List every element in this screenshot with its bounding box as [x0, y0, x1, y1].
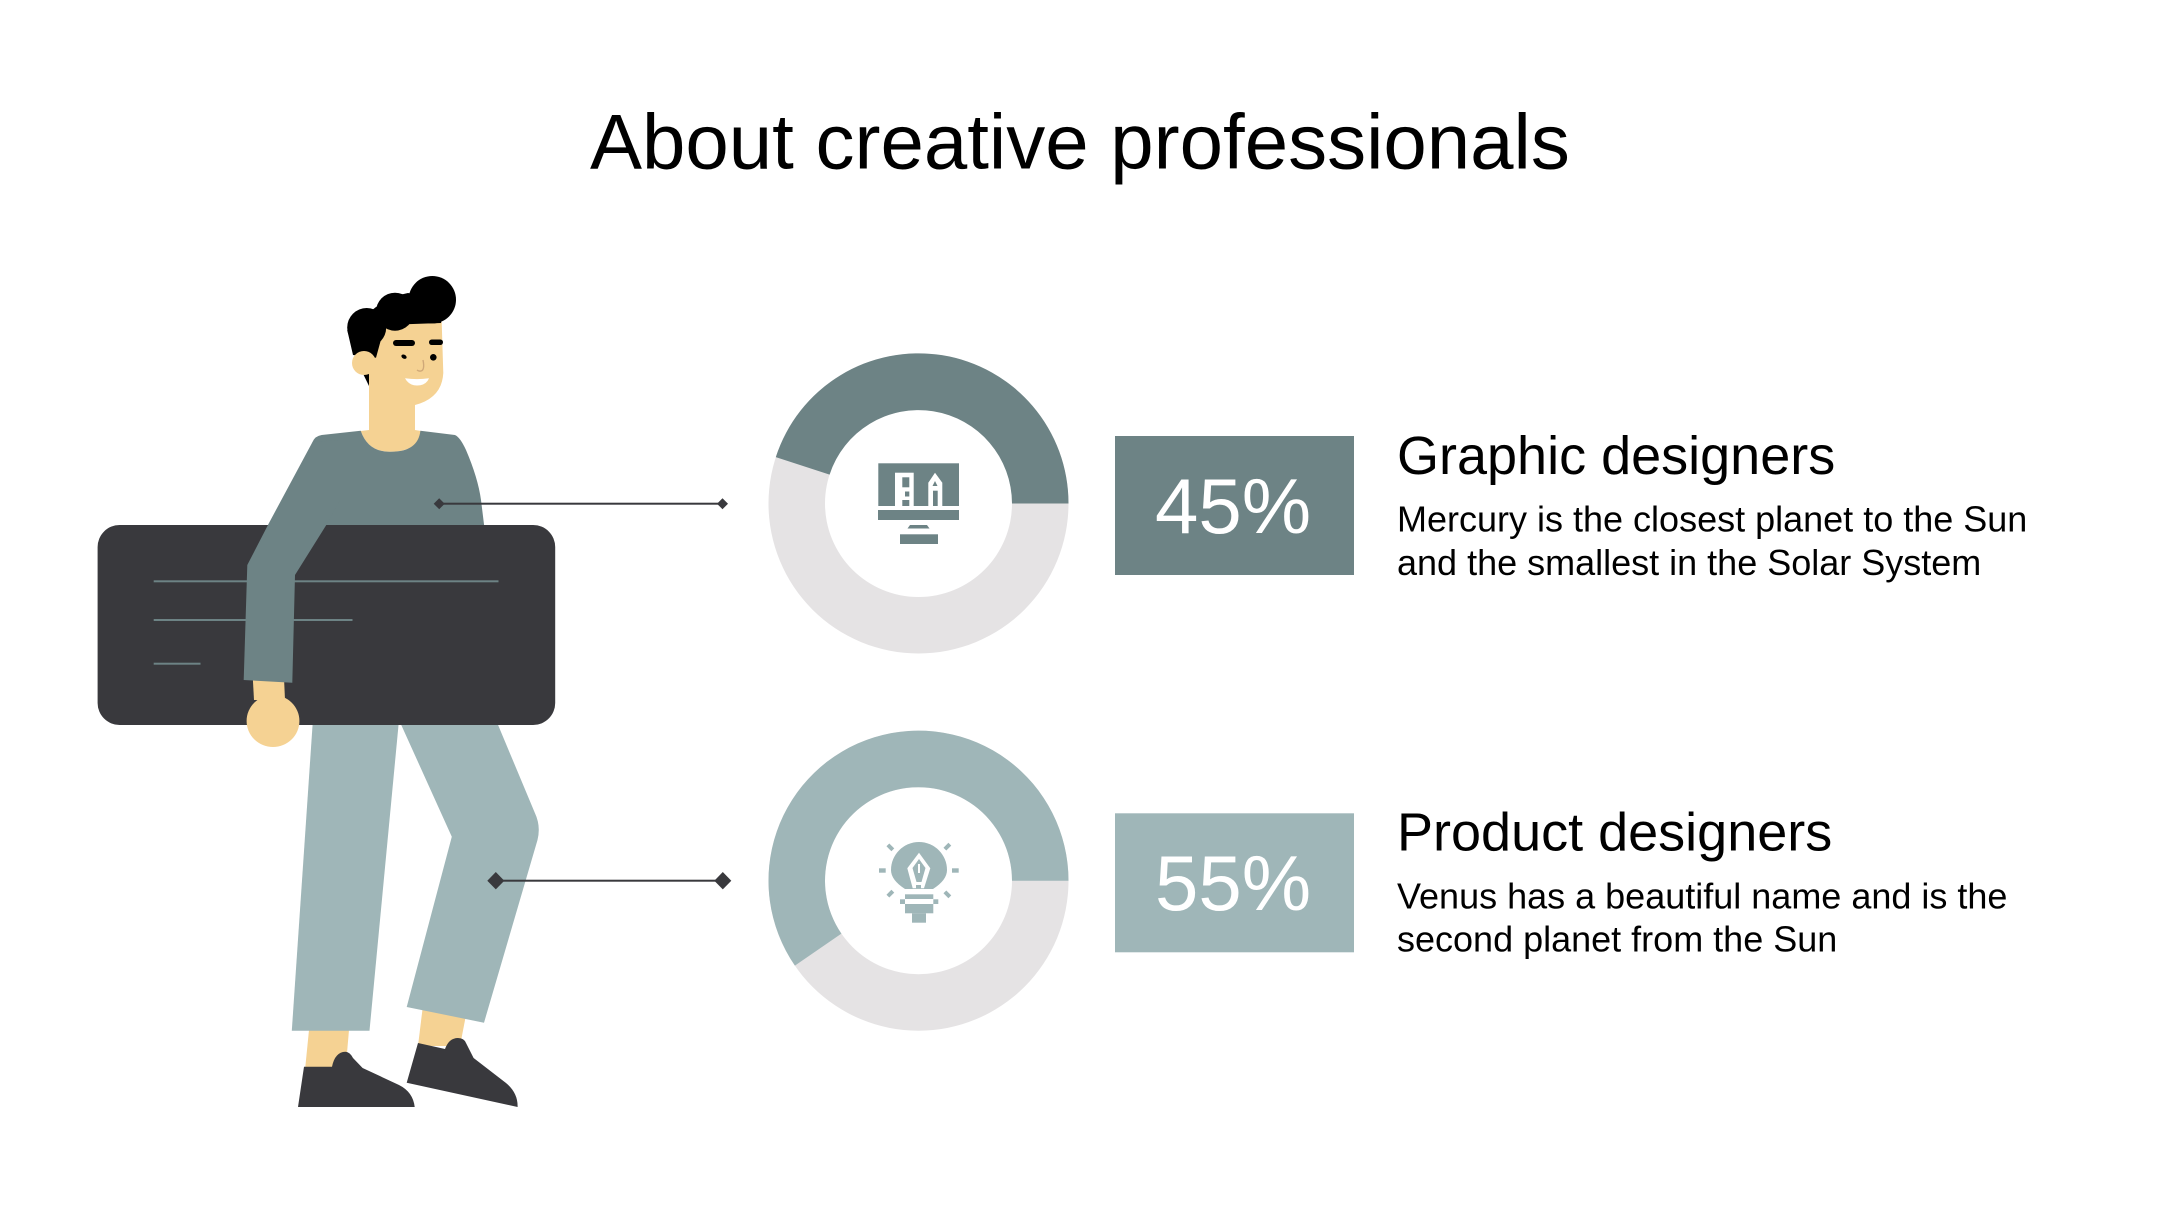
donut value arc: [768, 731, 1069, 966]
heading: graphic designers: Graphic designers: [1397, 426, 1835, 486]
donut chart: product designers 55%: [768, 731, 1069, 1031]
head: [347, 276, 456, 405]
ear: [352, 351, 376, 375]
donut base: [768, 354, 1068, 654]
percentage box: 45%: [1115, 436, 1354, 575]
arm sleeve: [244, 440, 340, 683]
title: About creative professionals: [590, 97, 1570, 185]
hair: [347, 276, 456, 358]
percentage box: 55%: 55%: [1155, 839, 1311, 927]
right eyebrow: [429, 340, 443, 345]
nose: [417, 360, 424, 371]
right eye: [430, 354, 437, 361]
percentage box: 55%: [1115, 813, 1354, 952]
text block: product designers: [1397, 803, 2007, 960]
right ankle: [418, 1005, 466, 1046]
body: venus: Venus has a beautiful name and is the: [1397, 875, 2007, 916]
heading: product designers: Product designers: [1397, 803, 1832, 863]
wrist: [253, 678, 285, 700]
smile: [405, 378, 429, 386]
tablet body: [98, 525, 555, 725]
right shoe: [407, 1038, 518, 1107]
left eye: [401, 354, 407, 360]
hand: [247, 695, 299, 747]
torso: [300, 431, 485, 530]
donut chart: graphic designers 45%: [768, 353, 1069, 654]
left shoe: [298, 1052, 415, 1107]
left ankle: [305, 1030, 349, 1070]
body: mercury: Mercury is the closest planet to the Sun: [1397, 498, 2027, 540]
donut base: [768, 731, 1068, 1031]
face: [369, 322, 443, 405]
body: venus: second planet from the Sun: [1397, 919, 1837, 960]
connector line: torso to donut 1: [434, 498, 728, 509]
percentage box: 45%: 45%: [1155, 462, 1311, 550]
connector line: leg to donut 2: [487, 872, 731, 889]
text block: graphic designers: [1397, 426, 2027, 583]
illustration: creative professional carrying a tablet: [98, 276, 555, 1107]
tablet: [98, 525, 555, 725]
tablet text lines: [154, 580, 498, 665]
neck and collar: [361, 370, 421, 452]
right trouser leg: [399, 720, 539, 1023]
hair back tuft: [363, 373, 369, 386]
icon: light bulb with pen nib: [879, 842, 959, 923]
body: mercury: and the smallest in the Solar System: [1397, 542, 1981, 583]
left trouser leg: [292, 720, 399, 1031]
icon: monitor with ruler and pencil: [878, 463, 959, 544]
left eyebrow: [393, 340, 415, 346]
donut value arc: [776, 353, 1069, 504]
